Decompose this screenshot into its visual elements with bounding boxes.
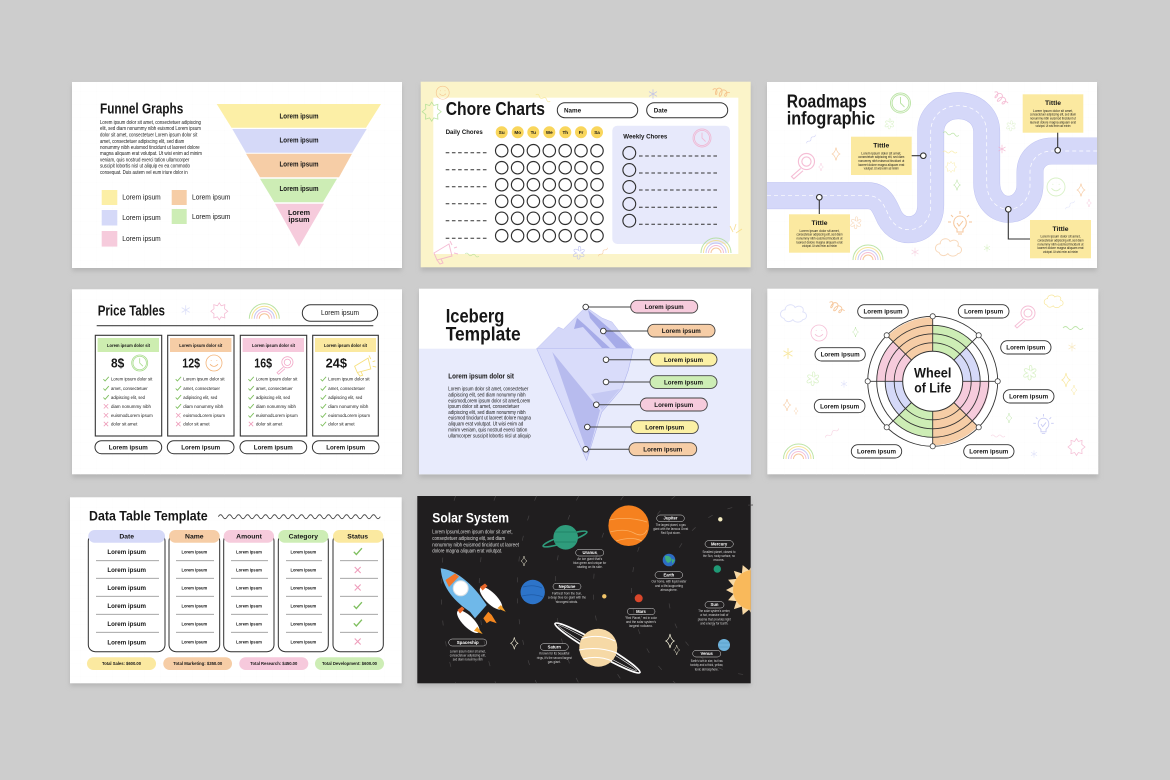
callout: bottom right: volutpat. Ut wisi enim ad minim <box>1043 250 1078 254</box>
pricing card: 24$: adipiscing elit, sed <box>328 395 363 400</box>
funnel chart: Lorem ipsum <box>280 160 318 168</box>
pricing card: 12$: adipiscing elit, sed <box>183 395 218 400</box>
callout: top right: volutpat. Ut wisi enim ad minim <box>1036 124 1071 128</box>
wheel labels: Lorem ipsum <box>857 449 896 456</box>
name column values: Lorem ipsum <box>181 568 207 573</box>
label: mars: "Red Planet," red in color <box>625 616 658 620</box>
pricing card: 12$: amet, consectetuer <box>183 386 220 391</box>
category column values <box>290 550 316 645</box>
heading: iceberg template <box>446 307 521 345</box>
planet: mercury <box>714 565 721 573</box>
totals row: Total Sales: $600.00 <box>102 661 142 666</box>
text block: funnel description: nonummy nibh euismod tincidunt ut laoreet dolore <box>100 145 200 151</box>
label: mercury: Mercury <box>711 541 728 546</box>
date column values: Lorem ipsum <box>107 585 146 592</box>
pricing card: 8$: 8$ <box>111 357 124 371</box>
daily chores table <box>446 126 603 242</box>
pricing card: 12$: euismodLorem ipsum <box>183 413 225 418</box>
legend: Lorem ipsum <box>192 193 230 202</box>
callout: top right: laoreet dolore magna aliquam erat <box>1030 120 1076 124</box>
wheel labels: Lorem ipsum <box>820 403 859 410</box>
table column headers <box>88 530 383 543</box>
pricing card: 8$: adipiscing elit, sed <box>111 395 145 400</box>
pricing card: 16$: Lorem ipsum dolor sit <box>256 377 298 382</box>
panel: roadmaps infographic <box>760 82 1105 271</box>
label: neptune: a deep blue ice giant with the <box>548 596 586 600</box>
text block: solar description: dolore magna aliquam erat volutpat. <box>432 549 502 555</box>
label: mars: Mars <box>636 609 647 614</box>
panel: funnel graphs <box>72 82 402 271</box>
legend: Lorem ipsum <box>122 193 161 202</box>
label: sun <box>698 602 731 626</box>
label: sun: The solar system's center, <box>698 609 730 613</box>
daily chores table: Fr <box>579 130 584 135</box>
label: uranus: Uranus <box>582 550 598 555</box>
text block: iceberg description: adipiscing elit, sed diam nonummy nibh <box>448 410 526 416</box>
table column headers: Date <box>119 534 134 540</box>
connectors and labels: Lorem ipsum <box>664 380 703 386</box>
name column values: Lorem ipsum <box>181 622 207 627</box>
callout: bottom right <box>1030 220 1091 258</box>
label: earth: Our home, with liquid water <box>652 580 687 584</box>
pricing card: 8$: diam nonummy nibh <box>111 404 151 409</box>
name column values: Lorem ipsum <box>181 586 207 591</box>
callout: top right <box>1023 94 1083 133</box>
connectors <box>816 132 1060 239</box>
legend: Lorem ipsum <box>192 212 230 221</box>
label: saturn: gas giant. <box>548 660 561 664</box>
pricing card: 16$: amet, consectetuer <box>256 386 293 391</box>
callout: top right: nonummy nibh euismod tincidunt ut <box>1030 117 1076 121</box>
pricing card: 8$: dolor sit amet <box>111 422 138 427</box>
pricing card: 16$: diam nonummy nibh <box>256 404 296 409</box>
heading: roadmaps infographic: infographic <box>787 108 875 128</box>
connectors and labels: Lorem ipsum <box>645 304 684 311</box>
text block: iceberg description: aliquam erat volutpat. Ut wisi enim ad <box>448 422 523 428</box>
label: mercury: moons. <box>714 558 724 562</box>
weekly chores panel <box>612 126 730 244</box>
subheading: Lorem ipsum dolor sit <box>448 371 514 380</box>
pricing card: 8$ <box>95 335 162 436</box>
category column values: Lorem ipsum <box>290 586 316 591</box>
funnel chart: Lorem <box>288 208 310 217</box>
status column marks <box>354 548 362 644</box>
pricing card: 24$: euismodLorem ipsum <box>328 413 370 418</box>
doodles <box>422 86 742 264</box>
label: mars: and the solar system's <box>626 620 656 624</box>
pricing card: 24$: Lorem ipsum dolor sit <box>324 343 367 349</box>
callout: bottom left <box>789 214 850 253</box>
table column bodies <box>88 534 383 652</box>
date column values: Lorem ipsum <box>107 603 146 610</box>
label: earth: Earth <box>663 572 675 577</box>
pricing card: 12$ <box>168 335 234 436</box>
callout: middle: volutpat. Ut wisi enim ad minim <box>864 167 899 171</box>
wheel labels: Lorem ipsum <box>969 449 1008 456</box>
label: saturn: Known for its beautiful <box>539 652 569 656</box>
pricing card: 24$: diam nonummy nibh <box>328 404 369 409</box>
pricing card: 24$: amet, consectetuer <box>328 386 365 391</box>
text block: funnel description: consequat. Duis autem vel eum iriure dolor in <box>100 170 188 176</box>
label: venus: toxicity and a thick, yellow, <box>690 663 723 667</box>
label: saturn <box>537 644 572 664</box>
callout: bottom right: Tittle <box>1052 226 1069 233</box>
callout: middle: Lorem ipsum dolor sit amet, <box>861 151 901 155</box>
label: neptune: Farthest from the Sun, <box>552 592 582 596</box>
label: uranus: An ice giant that's <box>577 557 602 561</box>
connectors and labels: Lorem ipsum <box>662 328 701 335</box>
pricing card: 8$: Lorem ipsum dolor sit <box>107 343 150 349</box>
daily chores table: Su <box>499 130 505 135</box>
pricing card: 12$: dolor sit amet <box>183 422 210 427</box>
connectors and labels: Lorem ipsum <box>645 424 684 432</box>
label: venus: toxic atmosphere. <box>695 668 719 672</box>
daily chores table: Daily Chores <box>446 129 483 136</box>
category column values: Lorem ipsum <box>290 622 316 627</box>
footer pill buttons: Lorem ipsum <box>181 445 220 452</box>
date field: Date <box>654 108 668 114</box>
text block: solar description <box>432 530 519 555</box>
totals row: Total Marketing: $350.00 <box>173 661 223 666</box>
label: venus: Venus <box>701 651 714 656</box>
amount column values: Lorem ipsum <box>236 568 262 573</box>
footer pill buttons: Lorem ipsum <box>109 445 148 452</box>
label: spaceship: Spaceship <box>457 640 479 645</box>
text block: funnel description: magna aliquam erat volutpat. Ut wisi enim ad minim <box>100 151 202 157</box>
pricing card: 8$: euismodLorem ipsum <box>111 413 153 418</box>
date field <box>647 103 728 118</box>
name column values: Lorem ipsum <box>181 550 207 555</box>
wheel labels: Lorem ipsum <box>821 352 860 359</box>
callout: bottom right: nonummy nibh euismod tincidunt ut <box>1038 242 1084 246</box>
text block: solar description: consectetuer adipiscing elit, sed diam <box>432 536 505 542</box>
label: jupiter: The largest planet, a gas <box>656 523 686 527</box>
pricing card: 16$: adipiscing elit, sed <box>256 395 290 400</box>
label: uranus <box>573 549 607 569</box>
heading: iceberg template: Template <box>446 324 521 345</box>
panel: price tables <box>72 289 402 478</box>
pricing card: 16$: dolor sit amet <box>256 422 283 427</box>
wheel labels: Lorem ipsum <box>1006 345 1045 352</box>
callout: bottom right: consectetuer adipiscing elit, sed diam <box>1038 238 1084 242</box>
wheel chart <box>865 314 1000 449</box>
label: mars: largest volcano. <box>629 624 653 628</box>
heading: roadmaps infographic: Roadmaps <box>787 91 867 111</box>
rocket <box>441 568 506 636</box>
iceberg illustration <box>537 307 633 460</box>
totals row <box>87 657 384 670</box>
callout: bottom right: laoreet dolore magna aliquam erat <box>1038 246 1084 250</box>
label: spaceship: consectetuer adipiscing elit, <box>450 654 486 658</box>
date column values: Lorem ipsum <box>107 621 146 628</box>
panel: solar system <box>417 496 773 686</box>
label: jupiter <box>653 515 688 535</box>
name column values: Lorem ipsum <box>181 640 207 645</box>
label: neptune: Neptune <box>559 584 576 589</box>
wheel labels: Lorem ipsum <box>864 309 903 316</box>
table column headers: Name <box>185 534 204 540</box>
doodles <box>780 295 1085 459</box>
label: mercury <box>702 541 736 562</box>
planet: earth <box>663 554 675 566</box>
pricing card: 12$: Lorem ipsum dolor sit <box>183 377 225 382</box>
amount column values: Lorem ipsum <box>236 586 262 591</box>
pricing card: 16$: Lorem ipsum dolor sit <box>252 343 295 349</box>
footer pill buttons: Lorem ipsum <box>254 445 293 452</box>
weekly chores panel: Weekly Chores <box>623 134 668 140</box>
funnel chart: Lorem ipsum <box>280 184 318 193</box>
callout: bottom left: Tittle <box>812 220 828 227</box>
daily chores table: Th <box>562 130 568 135</box>
category column values: Lorem ipsum <box>290 568 316 573</box>
pricing card: 16$ <box>240 335 307 436</box>
pricing card: 16$: euismodLorem ipsum <box>256 413 298 418</box>
label: jupiter: Red Spot storm. <box>661 531 681 535</box>
text block: iceberg description: ipsum dolor sit amet, consectetuer <box>448 404 520 410</box>
funnel chart: Lorem ipsum <box>280 111 318 120</box>
panel: iceberg template <box>419 289 751 478</box>
text block: solar description: Lorem IpsumLorem ipsum dolor sit amet, <box>432 530 513 536</box>
label: mars <box>625 608 658 628</box>
table column headers: Status <box>347 534 368 540</box>
heading: price tables: Price Tables <box>98 302 165 319</box>
name column values: Lorem ipsum <box>181 604 207 609</box>
wheel chart: Wheel <box>914 365 951 380</box>
pricing card: 8$: Lorem ipsum dolor sit <box>111 377 153 382</box>
wheel chart: of Life <box>914 380 952 395</box>
label: uranus: rotating on its side. <box>577 565 603 569</box>
label: venus: Earth's twin in size, but has <box>691 659 723 663</box>
label: sun: a hot, massive ball of <box>700 613 728 617</box>
text block: iceberg description <box>448 387 531 439</box>
planet: jupiter <box>608 505 649 546</box>
pricing card: 24$: Lorem ipsum dolor sit <box>328 377 370 382</box>
date column values: Lorem ipsum <box>107 639 146 646</box>
callout: top right: consectetuer adipiscing elit, sed diam <box>1030 113 1076 117</box>
daily chores table: We <box>546 130 553 135</box>
top pill button: Lorem ipsum <box>321 308 359 317</box>
table column headers: Amount <box>236 534 263 540</box>
label: earth: and a life-supporting <box>655 584 683 588</box>
category column values: Lorem ipsum <box>290 640 316 645</box>
callout: middle: nonummy nibh euismod tincidunt ut <box>858 159 904 163</box>
callout: middle: laoreet dolore magna aliquam erat <box>858 163 904 167</box>
footer pill buttons: Lorem ipsum <box>326 445 365 452</box>
planet: neptune <box>520 580 545 604</box>
label: mercury: Smallest planet, closest to <box>702 550 736 554</box>
label: earth <box>652 572 687 592</box>
funnel chart: Lorem ipsum <box>280 135 318 144</box>
category column values: Lorem ipsum <box>290 604 316 609</box>
footer pill buttons <box>95 441 379 454</box>
doodles <box>182 303 279 320</box>
label: spaceship: Lorem ipsum dolor sit amet, <box>450 650 486 654</box>
label: jupiter: giant with the famous Great <box>653 527 688 531</box>
callout: bottom right: Lorem ipsum dolor sit amet, <box>1040 235 1080 239</box>
legend: Lorem ipsum <box>122 213 161 222</box>
totals row: Total Development: $600.00 <box>322 661 378 666</box>
label: earth: atmosphere. <box>660 588 678 592</box>
amount column values: Lorem ipsum <box>236 622 262 627</box>
label: neptune <box>548 583 586 604</box>
table column headers: Category <box>289 534 318 540</box>
callout: bottom left: Lorem ipsum dolor sit amet, <box>800 229 840 233</box>
wheel labels: Lorem ipsum <box>964 309 1003 316</box>
text block: iceberg description: euismod tincidunt ut laoreet dolore magna <box>448 416 531 422</box>
name field: Name <box>564 108 582 114</box>
pricing card: 8$: amet, consectetuer <box>111 386 148 391</box>
label: jupiter: Jupiter <box>664 516 678 521</box>
wheel labels: Lorem ipsum <box>1009 394 1048 401</box>
pricing card: 24$: 24$ <box>326 357 347 371</box>
amount column values: Lorem ipsum <box>236 640 262 645</box>
callout: middle: Tittle <box>873 143 890 150</box>
panel: chore charts <box>421 82 751 271</box>
pricing card: 24$ <box>313 335 378 436</box>
label: neptune: strongest winds. <box>556 600 578 604</box>
heading: solar system: Solar System <box>432 511 509 526</box>
panel: wheel of life <box>767 289 1098 478</box>
legend <box>102 190 230 247</box>
text block: iceberg description: adipiscing elit, sed diam nonummy nibh <box>448 393 526 399</box>
pricing card: 16$: 16$ <box>254 357 272 371</box>
callout: bottom left: nonummy nibh euismod tincidunt ut <box>796 237 842 241</box>
callout: bottom left: volutpat. Ut wisi enim ad minim <box>802 244 837 248</box>
totals row: Total Research: $450.00 <box>250 661 298 666</box>
connectors and labels <box>583 300 717 456</box>
label: spaceship <box>449 639 487 662</box>
text block: funnel description: dolor sit amet, consectetuer Lorem ipsum dolor sit <box>100 132 198 138</box>
funnel chart: ipsum <box>288 215 310 224</box>
text block: solar description: nonummy nibh euismod tincidunt ut laoreet <box>432 542 519 548</box>
callout: middle: consectetuer adipiscing elit, sed diam <box>858 155 904 159</box>
planet: saturn <box>552 619 643 677</box>
callout: top right: Tittle <box>1045 100 1061 107</box>
text block: funnel description: elit, sed diam nonummy nibh euismod Lorem ipsum <box>100 126 201 132</box>
date column values: Lorem ipsum <box>107 549 146 556</box>
label: sun: Sun <box>711 602 719 607</box>
text block: funnel description: Lorem ipsum dolor sit amet, consectetuer adipiscing <box>100 120 201 126</box>
callout: bottom left: consectetuer adipiscing elit, sed diam <box>796 233 843 237</box>
text block: iceberg description: ullamcorper suscipit lobortis nisl ut aliquip <box>448 433 531 439</box>
category column values: Lorem ipsum <box>290 550 316 555</box>
heading: chore charts: Chore Charts <box>446 99 545 119</box>
amount column values: Lorem ipsum <box>236 604 262 609</box>
date column values: Lorem ipsum <box>107 567 146 574</box>
pricing card: 24$: dolor sit amet <box>328 422 355 427</box>
text block: funnel description: veniam, quis nostrud exerci tation ullamcorper <box>100 158 190 164</box>
heading: iceberg template: Iceberg <box>446 307 504 328</box>
amount column values <box>236 550 262 645</box>
label: sun: and energy for Earth. <box>700 622 728 626</box>
heading: data table template: Data Table Template <box>89 509 208 524</box>
road <box>760 106 1105 230</box>
text block: funnel description <box>100 120 202 176</box>
label: saturn: Saturn <box>548 644 561 649</box>
label: venus <box>690 650 723 672</box>
pricing card: 12$: Lorem ipsum dolor sit <box>179 343 223 349</box>
text block: iceberg description: euismodLorem ipsum dolor sit ametLorem <box>448 398 530 404</box>
label: uranus: blue-green and unique for <box>573 561 607 565</box>
label: spaceship: sed diam nonummy nibh <box>453 658 483 662</box>
heading: funnel graphs: Funnel Graphs <box>100 101 183 117</box>
daily chores table: Tu <box>531 130 536 135</box>
label: mercury: the Sun, rocky surface, no <box>703 554 735 558</box>
wheel labels <box>814 305 1054 458</box>
funnel chart <box>217 104 381 247</box>
text block: funnel description: suscipit lobortis nisl ut aliquip ex ea commodo <box>100 164 190 170</box>
text block: iceberg description: Lorem ipsum dolor sit amet, consectetuer <box>448 387 529 393</box>
planet: mars <box>635 594 643 602</box>
text block: iceberg description: minim veniam, quis nostrud exerci tation <box>448 427 527 433</box>
text block: funnel description: amet, consectetuer adipiscing elit, sed diam <box>100 139 184 145</box>
pricing card: 12$: 12$ <box>182 357 200 371</box>
doodles <box>792 91 1091 260</box>
daily chores table: Mo <box>514 130 521 135</box>
callout: bottom left: laoreet dolore magna aliquam erat <box>796 240 842 244</box>
callout: middle <box>851 137 912 175</box>
planet: venus <box>718 639 730 651</box>
connectors and labels: Lorem ipsum <box>664 357 703 364</box>
label: sun: plasma that provides light <box>698 618 731 622</box>
pricing card: 12$: diam nonummy nibh <box>183 404 224 409</box>
name column values <box>181 550 207 645</box>
top pill button <box>302 305 378 321</box>
heading: roadmaps infographic <box>787 91 875 128</box>
stars <box>511 517 722 655</box>
daily chores table: Sa <box>594 130 600 135</box>
planet: uranus <box>542 525 588 550</box>
label: saturn: rings, it's the second largest <box>537 656 572 660</box>
name field <box>557 103 638 118</box>
amount column values: Lorem ipsum <box>236 550 262 555</box>
legend: Lorem ipsum <box>122 234 161 243</box>
panel: data table template <box>70 497 402 686</box>
connectors and labels: Lorem ipsum <box>643 447 682 454</box>
callout: top right: Lorem ipsum dolor sit amet, <box>1033 109 1073 113</box>
connectors and labels: Lorem ipsum <box>654 402 693 409</box>
date column values <box>107 549 146 646</box>
sun <box>726 565 751 615</box>
